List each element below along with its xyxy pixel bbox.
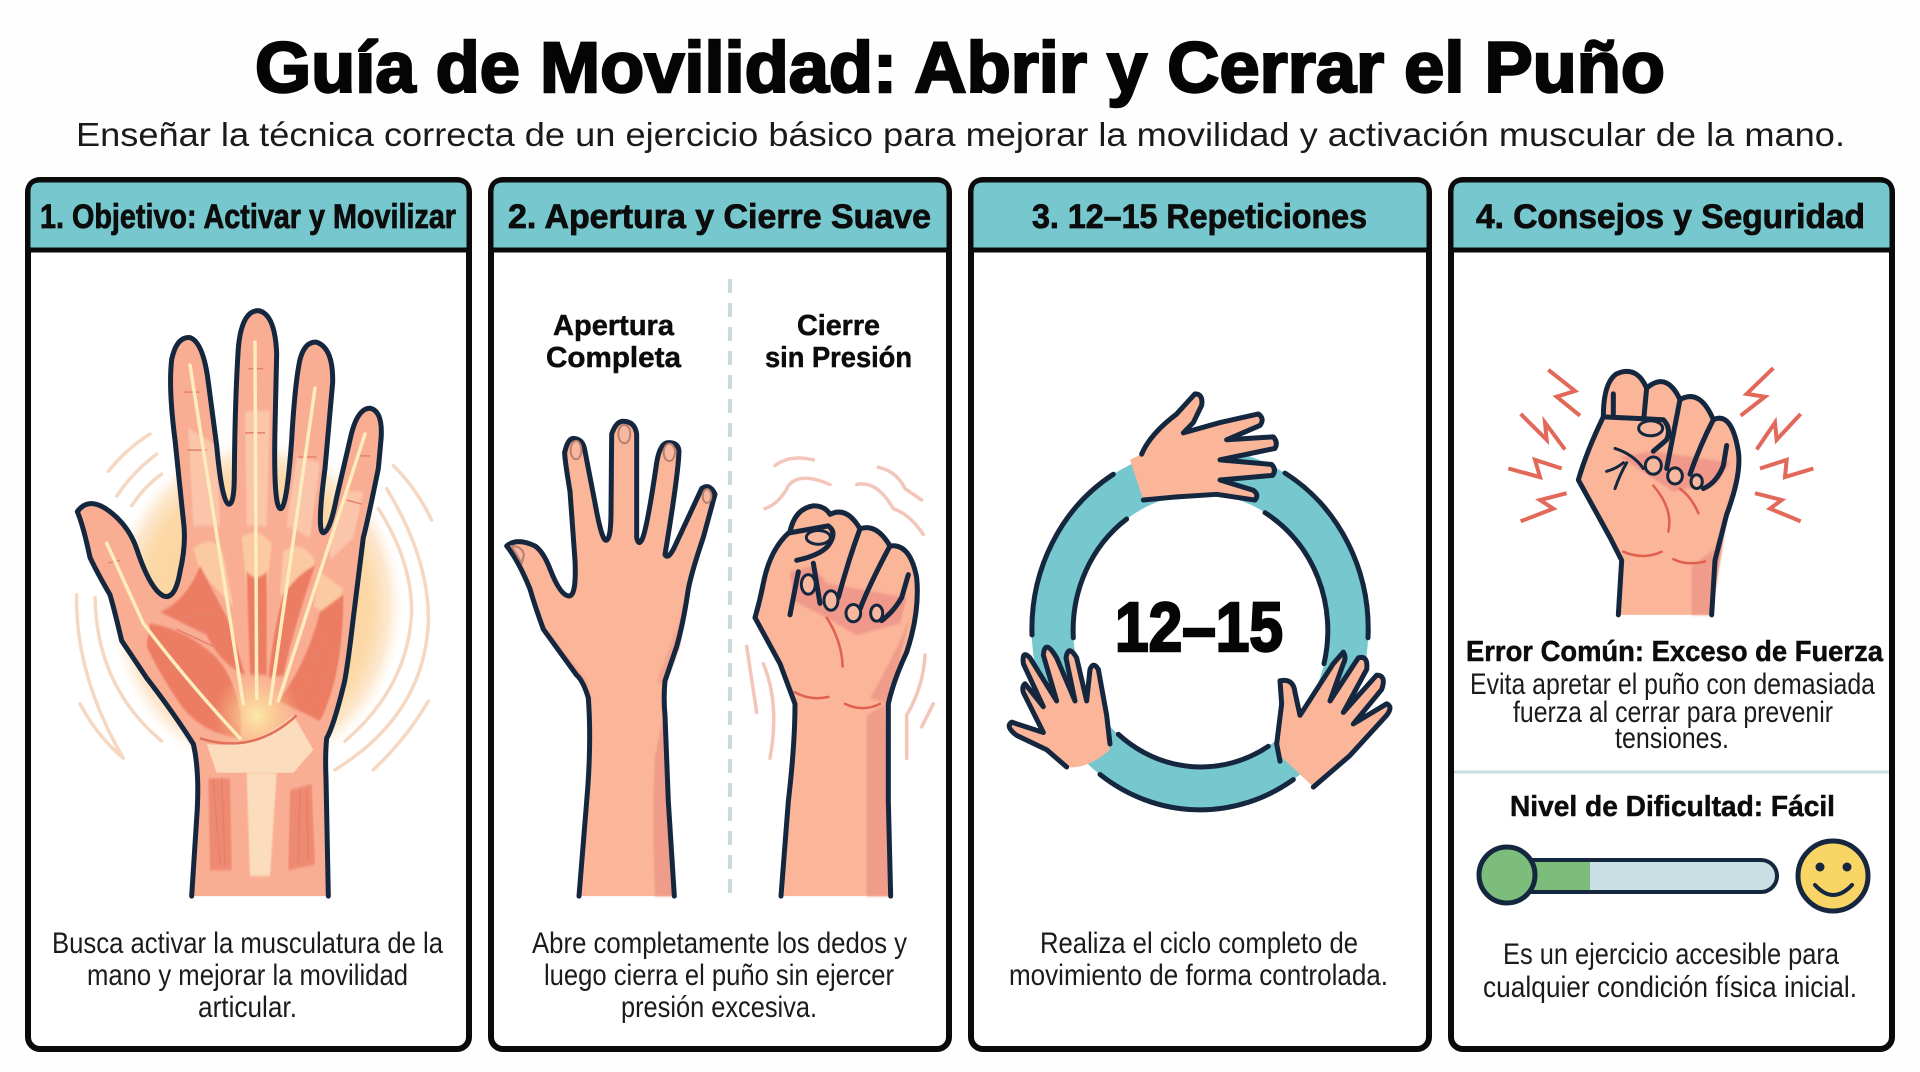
panel 3 description: Realiza el ciclo completo de (1040, 927, 1358, 960)
panel 2 description: luego cierra el puño sin ejercer (544, 959, 894, 992)
left hand (1009, 647, 1110, 767)
illustration: clenched fist with strain bolts (1508, 368, 1813, 615)
panel 2 description (532, 927, 907, 1024)
strain bolts (1508, 368, 1813, 521)
finger base highlights (188, 411, 363, 618)
ring (1032, 448, 1368, 810)
panel 1 header band (28, 180, 469, 250)
common error callout: tensiones. (1615, 722, 1729, 755)
panel 3 description (1009, 927, 1388, 992)
thumb and fingers (790, 526, 908, 621)
label: cierre sin presion (765, 310, 912, 374)
panel 1 description: articular. (198, 991, 297, 1024)
difficulty slider (1479, 847, 1777, 903)
panel 2 description: presión excesiva. (621, 991, 817, 1024)
label: cierre sin presion: Cierre (797, 310, 880, 342)
panel: apertura y cierre (491, 180, 949, 1049)
top hand (1130, 394, 1276, 500)
difficulty description: cualquier condición física inicial. (1483, 971, 1857, 1004)
illustration: hand anatomy with muscles (77, 311, 432, 896)
difficulty heading: Nivel de Dificultad: Fácil (1510, 791, 1835, 823)
illustration: relaxed fist (747, 458, 933, 896)
panel 3 header band (971, 180, 1429, 250)
panel 1 description (52, 927, 443, 1024)
panel 4 frame (1451, 180, 1892, 1049)
panel 2 header band (491, 180, 949, 250)
illustration: cycle ring with hands (1009, 394, 1390, 810)
panel 1 description: Busca activar la musculatura de la (52, 927, 443, 960)
panel 1 description: mano y mejorar la movilidad (87, 959, 408, 992)
right hand (1277, 652, 1390, 787)
label: apertura completa: Completa (546, 342, 682, 374)
label: cierre sin presion: sin Presión (765, 342, 912, 374)
label: apertura completa: Apertura (553, 310, 675, 342)
label: apertura completa (546, 310, 682, 374)
palm muscles (147, 566, 343, 738)
panel: objetivo (28, 180, 469, 1049)
repetition count: 12–15 (1115, 588, 1283, 666)
difficulty description: Es un ejercicio accesible para (1503, 938, 1839, 971)
wrist structures (207, 715, 313, 773)
difficulty description (1483, 938, 1857, 1004)
finger creases (108, 369, 370, 563)
subtitle: Enseñar la técnica correcta de un ejercicio básico para mejorar la movilidad y activación muscular de la mano. (76, 116, 1845, 153)
panel 1 heading: 1. Objetivo: Activar y Movilizar (40, 198, 456, 236)
panel 4 heading: 4. Consejos y Seguridad (1476, 198, 1865, 236)
common error callout (1466, 636, 1884, 755)
panel 4 header band (1451, 180, 1892, 250)
panel 2 description: Abre completamente los dedos y (532, 927, 907, 960)
panel 3 description: movimiento de forma controlada. (1009, 959, 1388, 992)
icon: smiley (1798, 841, 1868, 911)
panel: consejos y seguridad (1451, 180, 1892, 1049)
illustration: open hand (507, 421, 715, 896)
panel 2 heading: 2. Apertura y Cierre Suave (508, 198, 931, 236)
panel: repeticiones (971, 180, 1429, 1049)
panel 3 heading: 3. 12–15 Repeticiones (1032, 198, 1367, 236)
panel 2 frame (491, 180, 949, 1049)
common error callout: Error Común: Exceso de Fuerza (1466, 636, 1884, 668)
panel 1 frame (28, 180, 469, 1049)
title: Guía de Movilidad: Abrir y Cerrar el Puño (255, 29, 1665, 108)
hand silhouette (77, 311, 381, 896)
panel 3 frame (971, 180, 1429, 1049)
common error callout: fuerza al cerrar para prevenir (1513, 696, 1833, 729)
tendons (107, 342, 365, 738)
palm glow (213, 669, 300, 761)
